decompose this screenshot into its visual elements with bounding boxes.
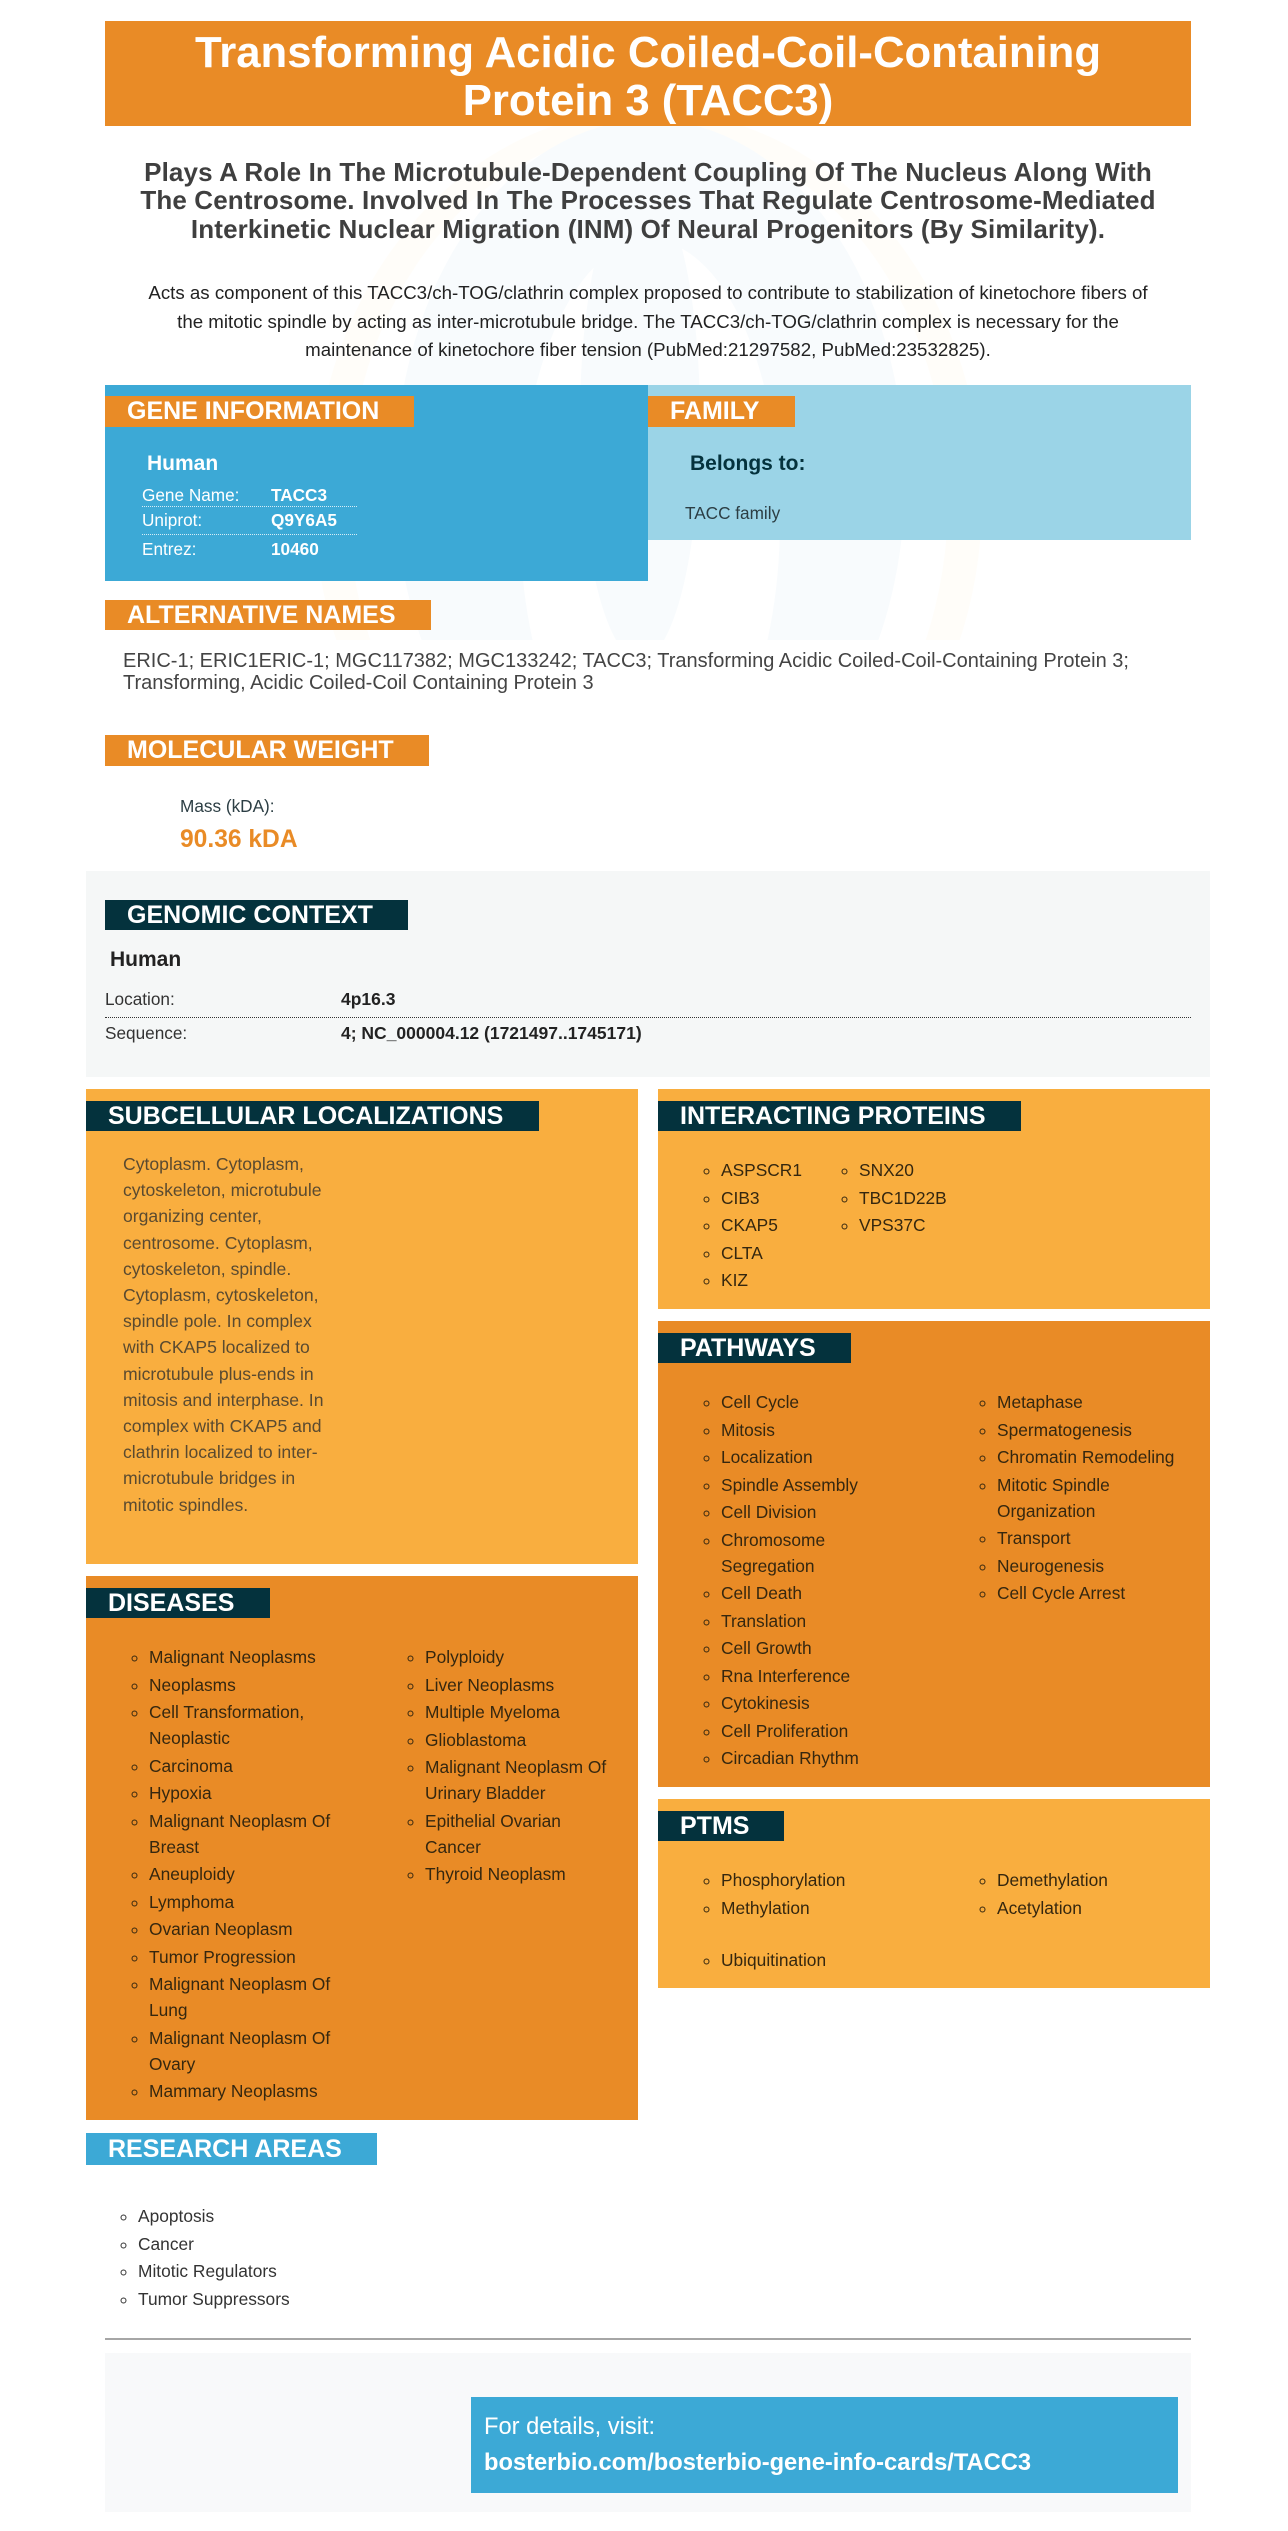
description paragraph xyxy=(148,282,1148,360)
pathway list column 2: Metaphase xyxy=(997,1392,1083,1412)
callout url: bosterbio.com/bosterbio-gene-info-cards/TACC3 xyxy=(484,2450,1031,2476)
protein list column 1: CKAP5 xyxy=(721,1215,778,1235)
location row: Location: xyxy=(105,989,175,1009)
localization text: centrosome. Cytoplasm, xyxy=(123,1233,313,1253)
localization text: spindle pole. In complex xyxy=(123,1311,312,1331)
disease list column 1: Cell Transformation, xyxy=(149,1702,304,1722)
uniprot row: Uniprot: xyxy=(142,510,202,530)
pathway list column 1: Cell Death xyxy=(721,1583,802,1603)
heading: diseases: DISEASES xyxy=(108,1589,234,1617)
ptm list column 2: Acetylation xyxy=(997,1898,1082,1918)
alternative names text xyxy=(123,650,1129,694)
heading: interacting proteins: INTERACTING PROTEINS xyxy=(680,1102,986,1130)
subtitle: The Centrosome. Involved In The Processes That Regulate Centrosome-Mediated xyxy=(140,185,1156,215)
pathway list column 2: Organization xyxy=(997,1500,1095,1520)
heading: pathways xyxy=(658,1333,851,1363)
uniprot row xyxy=(142,510,337,530)
callout label: For details, visit: xyxy=(484,2414,655,2440)
localization text: with CKAP5 localized to xyxy=(123,1337,310,1357)
research areas list xyxy=(120,2206,290,2308)
background watermark logo xyxy=(0,0,1288,640)
disease list column 1: Ovarian Neoplasm xyxy=(149,1919,293,1939)
heading: gene information: GENE INFORMATION xyxy=(127,397,379,425)
disease list column 1: Malignant Neoplasm Of xyxy=(149,1810,330,1830)
heading: molecular weight: MOLECULAR WEIGHT xyxy=(127,736,394,764)
pathway list column 2: Spermatogenesis xyxy=(997,1420,1132,1440)
research areas list: Tumor Suppressors xyxy=(138,2288,290,2308)
species label: Human xyxy=(110,948,181,971)
alternative names text: Transforming, Acidic Coiled-Coil Containing Protein 3 xyxy=(123,672,594,694)
localization text: cytoskeleton, microtubule xyxy=(123,1180,322,1200)
localization text: clathrin localized to inter- xyxy=(123,1442,318,1462)
ptm list column 2: Demethylation xyxy=(997,1870,1108,1890)
uniprot row: Q9Y6A5 xyxy=(271,510,337,530)
heading: research areas: RESEARCH AREAS xyxy=(108,2135,342,2163)
pathway list column 1: Cell Proliferation xyxy=(721,1720,848,1740)
ptm list column 1: Methylation xyxy=(721,1898,810,1918)
protein list column 2 xyxy=(842,1160,947,1235)
heading: subcellular localizations: SUBCELLULAR LOCALIZATIONS xyxy=(108,1102,503,1130)
protein list column 1: CIB3 xyxy=(721,1188,760,1208)
entrez row: 10460 xyxy=(271,539,319,559)
disease list column 2: Urinary Bladder xyxy=(425,1783,546,1803)
subtitle xyxy=(140,157,1156,244)
disease list column 2: Glioblastoma xyxy=(425,1730,526,1750)
heading: family: FAMILY xyxy=(670,397,759,425)
pathway list column 2: Chromatin Remodeling xyxy=(997,1447,1174,1467)
title: Protein 3 (TACC3) xyxy=(463,76,833,124)
disease list column 1: Lymphoma xyxy=(149,1892,234,1912)
pathway list column 2: Transport xyxy=(997,1528,1071,1548)
disease list column 1 xyxy=(132,1647,330,2101)
mass label: Mass (kDA): xyxy=(180,796,275,816)
gene name row xyxy=(142,485,327,505)
mass value: 90.36 kDA xyxy=(180,826,298,853)
disease list column 2: Cancer xyxy=(425,1836,481,1856)
disease list column 1: Lung xyxy=(149,2000,188,2020)
disease list column 1: Breast xyxy=(149,1836,199,1856)
panel: gene information xyxy=(105,385,648,581)
localization text: microtubule plus-ends in xyxy=(123,1364,314,1384)
localization text: Cytoplasm, cytoskeleton, xyxy=(123,1285,319,1305)
belongs to label: Belongs to: xyxy=(690,452,806,475)
pathway list column 1: Translation xyxy=(721,1610,806,1630)
description paragraph: the mitotic spindle by acting as inter-microtubule bridge. The TACC3/ch-TOG/clathrin complex is necessary for the xyxy=(177,310,1119,332)
protein list column 1: CLTA xyxy=(721,1242,763,1262)
sequence row: Sequence: xyxy=(105,1023,187,1043)
pathway list column 1: Segregation xyxy=(721,1556,815,1576)
disease list column 1: Tumor Progression xyxy=(149,1946,296,1966)
pathway list column 1: Cell Growth xyxy=(721,1638,812,1658)
subtitle: Plays A Role In The Microtubule-Dependent Coupling Of The Nucleus Along With xyxy=(144,157,1152,187)
pathway list column 1: Spindle Assembly xyxy=(721,1474,858,1494)
protein list column 2: SNX20 xyxy=(859,1160,914,1180)
localization text: mitotic spindles. xyxy=(123,1495,248,1515)
disease list column 2: Liver Neoplasms xyxy=(425,1674,554,1694)
heading: ptms: PTMS xyxy=(680,1812,749,1840)
pathway list column 1: Cell Cycle xyxy=(721,1392,799,1412)
localization text: complex with CKAP5 and xyxy=(123,1416,322,1436)
ptm list column 2 xyxy=(980,1870,1108,1918)
panel: genomic context: 4p16.3 xyxy=(341,989,395,1009)
research areas list: Cancer xyxy=(138,2234,194,2254)
panel: ptms xyxy=(658,1799,1210,1988)
research areas list: Apoptosis xyxy=(138,2206,214,2226)
disease list column 1: Mammary Neoplasms xyxy=(149,2081,318,2101)
alternative names text: ERIC-1; ERIC1ERIC-1; MGC117382; MGC133242; TACC3; Transforming Acidic Coiled-Coil-Containing Protein 3; xyxy=(123,650,1129,672)
callout: details link xyxy=(471,2397,1178,2493)
pathway list column 1: Chromosome xyxy=(721,1530,825,1550)
heading: pathways: PATHWAYS xyxy=(680,1334,816,1362)
subtitle: Interkinetic Nuclear Migration (INM) Of Neural Progenitors (By Similarity). xyxy=(191,214,1105,244)
localization text: cytoskeleton, spindle. xyxy=(123,1259,291,1279)
family value: TACC family xyxy=(685,503,780,523)
disease list column 2: Epithelial Ovarian xyxy=(425,1810,561,1830)
panel: genomic context xyxy=(86,871,1210,1077)
heading: family xyxy=(648,396,795,427)
protein list column 1: KIZ xyxy=(721,1270,748,1290)
panel: diseases xyxy=(86,1576,638,2120)
localization text: organizing center, xyxy=(123,1206,262,1226)
disease list column 1: Ovary xyxy=(149,2054,195,2074)
research areas list: Mitotic Regulators xyxy=(138,2261,277,2281)
entrez row xyxy=(142,539,319,559)
heading: alternative names: ALTERNATIVE NAMES xyxy=(127,601,396,629)
disease list column 1: Malignant Neoplasm Of xyxy=(149,2028,330,2048)
ptm list column 1 xyxy=(704,1870,845,1918)
localization text xyxy=(123,1154,323,1515)
heading: ptms xyxy=(658,1811,784,1841)
localization text: Cytoplasm. Cytoplasm, xyxy=(123,1154,304,1174)
disease list column 1: Malignant Neoplasms xyxy=(149,1647,316,1667)
panel: family xyxy=(648,385,1191,540)
panel: pathways xyxy=(658,1321,1210,1787)
disease list column 2: Polyploidy xyxy=(425,1647,504,1667)
heading: diseases xyxy=(86,1588,270,1618)
panel: genomic context: 4; NC_000004.12 (1721497..1745171) xyxy=(341,1023,642,1043)
ptm list column 1: Phosphorylation xyxy=(721,1870,845,1890)
description paragraph: maintenance of kinetochore fiber tension (PubMed:21297582, PubMed:23532825). xyxy=(305,339,991,360)
heading: genomic context: GENOMIC CONTEXT xyxy=(127,901,373,929)
pathway list column 1: Mitosis xyxy=(721,1420,775,1440)
pathway list column 2: Neurogenesis xyxy=(997,1556,1104,1576)
pathway list column 1: Cytokinesis xyxy=(721,1693,810,1713)
disease list column 1: Malignant Neoplasm Of xyxy=(149,1974,330,1994)
disease list column 1: Aneuploidy xyxy=(149,1864,235,1884)
pathway list column 1: Localization xyxy=(721,1447,813,1467)
pathway list column 1 xyxy=(704,1392,859,1768)
disease list column 2: Multiple Myeloma xyxy=(425,1702,560,1722)
localization text: microtubule bridges in xyxy=(123,1468,295,1488)
disease list column 1: Carcinoma xyxy=(149,1756,233,1776)
sequence row xyxy=(105,1023,642,1043)
panel: footer xyxy=(105,2353,1191,2512)
protein list column 2: TBC1D22B xyxy=(859,1188,947,1208)
location row xyxy=(105,989,395,1009)
disease list column 2 xyxy=(408,1647,606,1884)
pathway list column 2: Cell Cycle Arrest xyxy=(997,1583,1125,1603)
panel: subcellular localizations xyxy=(86,1089,638,1564)
pathway list column 1: Rna Interference xyxy=(721,1666,850,1686)
disease list column 1: Neoplastic xyxy=(149,1728,230,1748)
pathway list column 2: Mitotic Spindle xyxy=(997,1474,1110,1494)
protein list column 1: ASPSCR1 xyxy=(721,1160,802,1180)
title xyxy=(105,21,1191,126)
localization text: mitosis and interphase. In xyxy=(123,1390,323,1410)
gene name row: Gene Name: xyxy=(142,485,239,505)
panel: interacting proteins xyxy=(658,1089,1210,1309)
description paragraph: Acts as component of this TACC3/ch-TOG/clathrin complex proposed to contribute to stabilization of kinetochore fibers of xyxy=(148,282,1148,303)
ptm list continued: Ubiquitination xyxy=(721,1950,826,1970)
title: Transforming Acidic Coiled-Coil-Containing xyxy=(195,28,1101,77)
disease list column 1: Hypoxia xyxy=(149,1783,212,1803)
pathway list column 1: Circadian Rhythm xyxy=(721,1748,859,1768)
protein list column 2: VPS37C xyxy=(859,1215,926,1235)
pathway list column 2 xyxy=(980,1392,1174,1603)
species label: Human xyxy=(147,452,218,475)
protein list column 1 xyxy=(704,1160,802,1290)
disease list column 1: Neoplasms xyxy=(149,1674,236,1694)
disease list column 2: Malignant Neoplasm Of xyxy=(425,1757,606,1777)
gene name row: TACC3 xyxy=(271,485,327,505)
disease list column 2: Thyroid Neoplasm xyxy=(425,1864,566,1884)
entrez row: Entrez: xyxy=(142,539,196,559)
pathway list column 1: Cell Division xyxy=(721,1502,816,1522)
